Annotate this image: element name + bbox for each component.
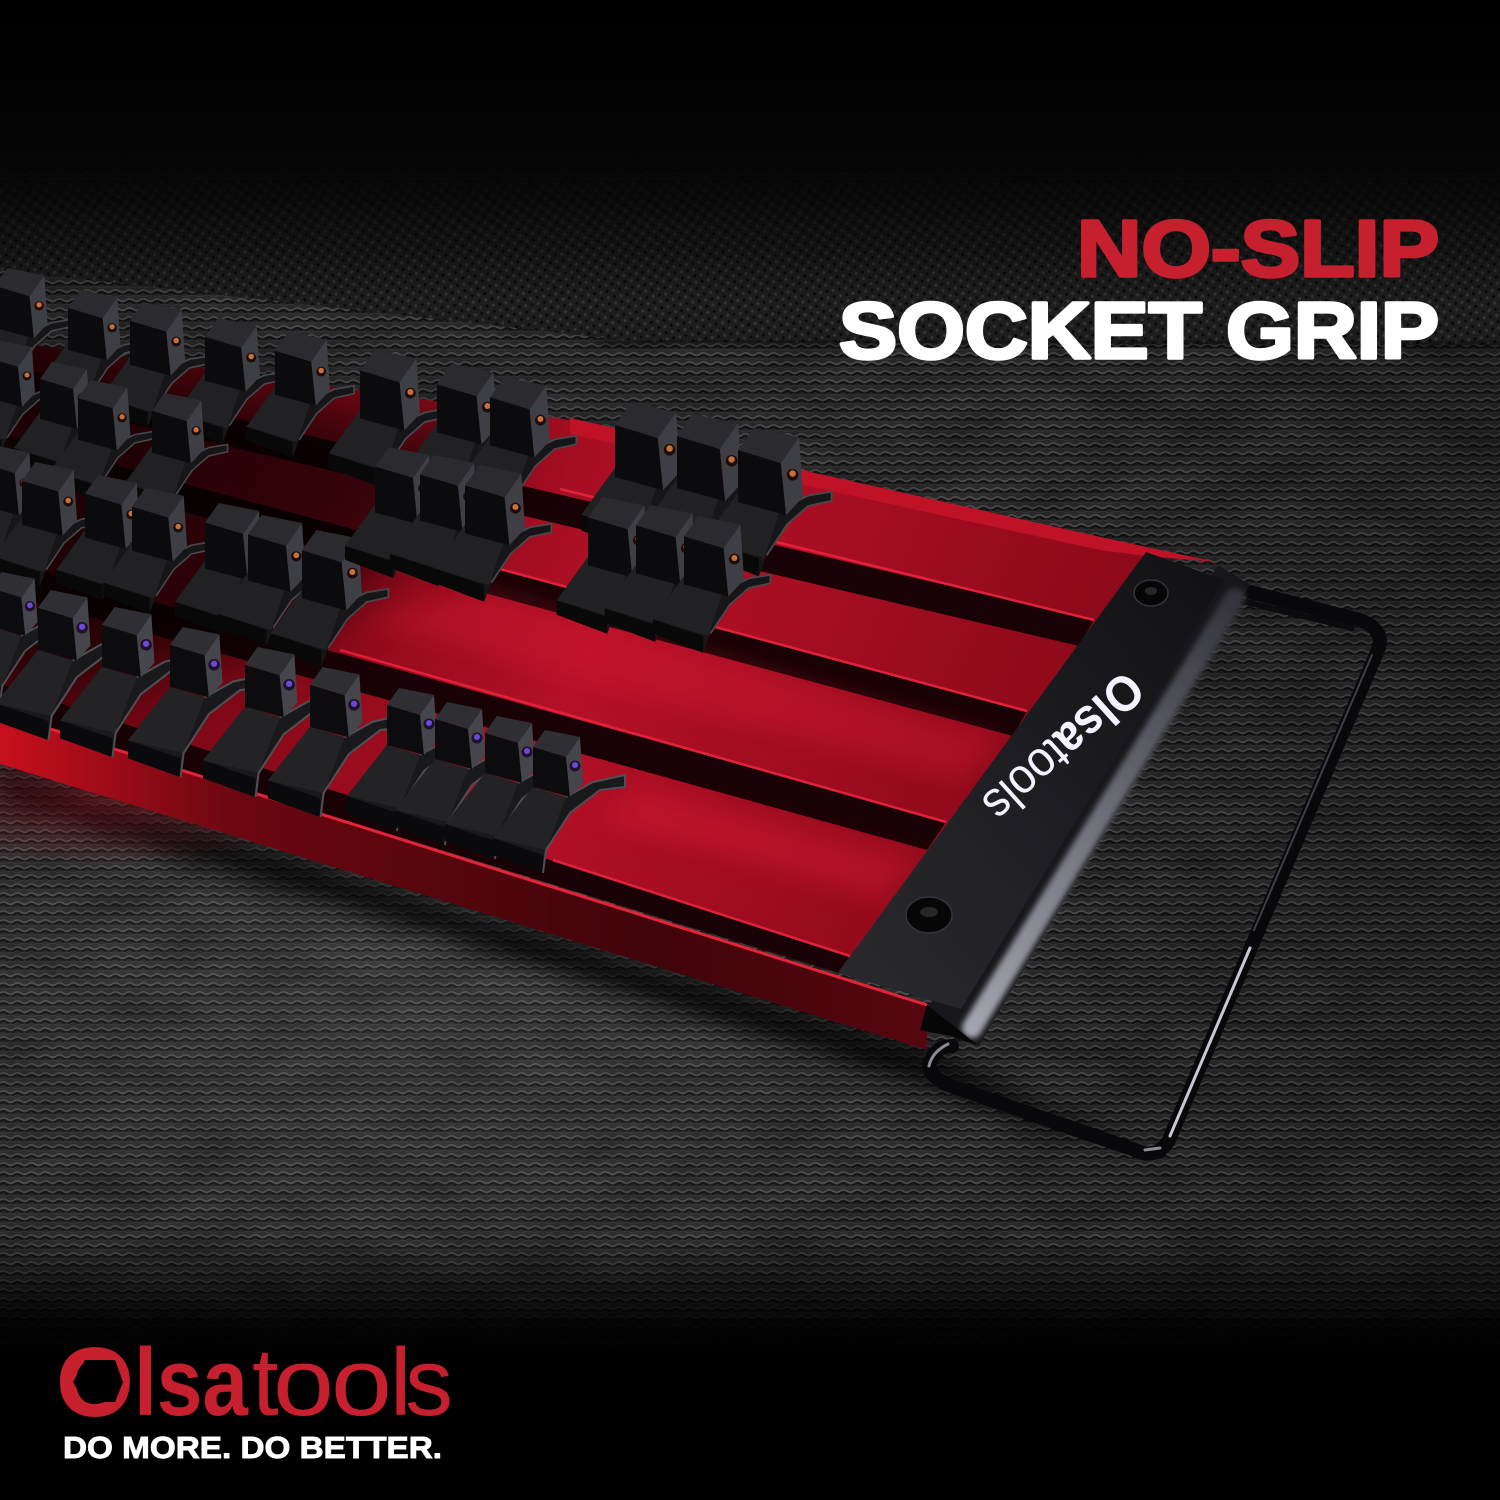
socket clips: second row left	[0, 340, 228, 513]
wire handle	[929, 592, 1380, 1154]
logo wordmark: o	[273, 1329, 334, 1436]
brand logo	[57, 1329, 453, 1465]
headline line 1: NO-SLIP	[1077, 204, 1439, 293]
tagline: DO MORE. DO BETTER.	[63, 1430, 442, 1465]
logo wordmark	[57, 1329, 453, 1436]
socket clips: right group	[557, 497, 770, 653]
socket clips: front row	[0, 572, 625, 873]
socket clips: back row	[0, 268, 576, 514]
bottom fade	[0, 1235, 1500, 1500]
tray: red aluminium rail	[0, 340, 1216, 1050]
side wall	[0, 713, 927, 1050]
logo wordmark: lsa	[134, 1329, 249, 1436]
socket clips: middle group	[345, 447, 551, 602]
end plate	[838, 552, 1250, 1046]
headline	[839, 204, 1439, 375]
logo wordmark: o	[331, 1329, 392, 1436]
tube highlight	[972, 598, 1235, 1028]
back wall strip	[570, 418, 1216, 562]
red reflection glow on mat	[0, 730, 330, 870]
screw bottom	[906, 897, 952, 933]
channel sheen	[360, 590, 1000, 780]
tube end opening	[920, 1005, 979, 1046]
socket clips: large group upper right	[581, 403, 832, 576]
plate top face	[838, 552, 1224, 1009]
tray shadow	[0, 770, 1170, 1165]
dark rear of tray	[0, 340, 520, 700]
tray floor	[0, 340, 1146, 973]
plate logo text: Olsatools	[972, 661, 1155, 834]
screw top	[1134, 580, 1168, 606]
logo wordmark: l	[390, 1329, 411, 1436]
socket clips: third row	[0, 445, 388, 667]
logo wordmark: s	[405, 1329, 453, 1436]
logo wordmark: O	[57, 1329, 133, 1436]
plate tube fold	[927, 565, 1250, 1046]
rail highlights	[340, 489, 1094, 956]
logo wordmark: t	[252, 1329, 279, 1436]
channel bands	[0, 363, 1094, 973]
background: rear mat band	[0, 0, 1500, 346]
headline line 2: SOCKET GRIP	[839, 286, 1439, 375]
